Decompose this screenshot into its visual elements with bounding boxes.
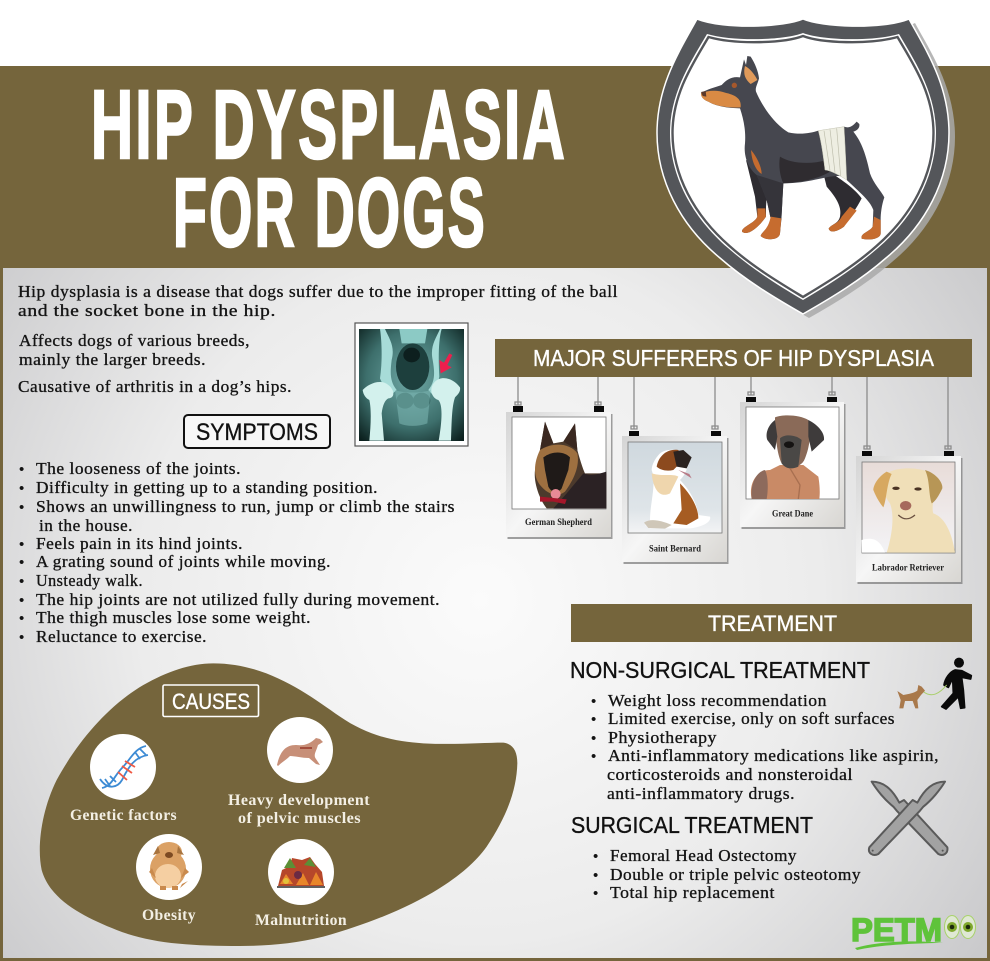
non-surgical list: • [591, 730, 596, 747]
shield badge with dog [657, 19, 955, 318]
cause: heavy development of pelvic muscles [228, 717, 370, 827]
intro text: Causative of arthritis in a dog’s hips. [18, 377, 292, 396]
title band [0, 66, 990, 268]
non-surgical list: Limited exercise, only on soft surfaces [608, 709, 895, 728]
panel border [0, 268, 990, 961]
symptoms list: • [19, 629, 24, 646]
icon: crossed scalpels [869, 782, 947, 855]
logo: PETMOO [851, 912, 976, 950]
non-surgical list: corticosteroids and nonsteroidal [607, 765, 853, 784]
symptoms list: • [19, 592, 24, 609]
treatment heading [571, 604, 972, 642]
non-surgical treatment heading: NON-SURGICAL TREATMENT [570, 657, 870, 683]
photo card: Great Dane [740, 402, 846, 529]
symptoms list: • [19, 573, 24, 590]
symptoms list: • [19, 554, 24, 571]
surgical list: • [593, 848, 598, 865]
title: FOR DOGS [173, 158, 487, 267]
symptoms list: The thigh muscles lose some weight. [36, 608, 311, 627]
cause: malnutrition [255, 839, 347, 929]
intro text: mainly the larger breeds. [19, 350, 206, 369]
symptoms list: Unsteady walk. [36, 571, 143, 590]
non-surgical list: Anti-inflammatory medications like aspirin, [608, 746, 939, 765]
intro text [18, 282, 618, 396]
photo card: Labrador Retriever: Labrador Retriever [872, 564, 945, 574]
icon: doberman with bandage [701, 56, 884, 239]
cause: malnutrition: Malnutrition [255, 912, 347, 929]
cause: obesity [136, 834, 202, 924]
x-ray image [355, 323, 468, 446]
panel: causes [40, 663, 517, 946]
surgical list: Femoral Head Ostectomy [610, 846, 797, 865]
symptoms list: Difficulty in getting up to a standing position. [36, 478, 378, 497]
intro text: and the socket bone in the hip. [18, 301, 276, 320]
major sufferers heading [495, 339, 972, 377]
non-surgical list: • [591, 693, 596, 710]
non-surgical list: Physiotherapy [608, 728, 717, 747]
cause: heavy development of pelvic muscles: of pelvic muscles [238, 810, 361, 827]
non-surgical list [591, 691, 939, 803]
surgical list: Double or triple pelvic osteotomy [610, 865, 861, 884]
non-surgical list: • [591, 748, 596, 765]
symptoms list: • [19, 480, 24, 497]
photo card: Saint Bernard [622, 436, 728, 564]
cause: heavy development of pelvic muscles: Heavy development [228, 792, 370, 809]
symptoms list: Feels pain in its hind joints. [36, 534, 243, 553]
cause: genetic factors: Genetic factors [70, 807, 177, 824]
symptoms list: • [19, 536, 24, 553]
cause: genetic factors [70, 734, 177, 824]
causes heading [163, 685, 258, 716]
surgical list [593, 846, 861, 902]
photo card: Labrador Retriever [856, 456, 962, 584]
title [91, 70, 567, 267]
non-surgical list: • [591, 711, 596, 728]
title: HIP DYSPLASIA [91, 70, 567, 179]
symptoms list: Shows an unwillingness to run, jump or climb the stairs [36, 497, 455, 516]
symptoms list: • [19, 499, 24, 516]
photo card: German Shepherd: German Shepherd [525, 518, 593, 528]
symptoms list: • [19, 610, 24, 627]
symptoms list: The hip joints are not utilized fully during movement. [36, 590, 440, 609]
symptoms list: Reluctance to exercise. [36, 627, 207, 646]
intro text: Hip dysplasia is a disease that dogs suffer due to the improper fitting of the ball [18, 282, 618, 301]
causes heading: CAUSES [172, 689, 250, 714]
non-surgical list: Weight loss recommendation [608, 691, 827, 710]
non-surgical list: anti-inflammatory drugs. [607, 784, 795, 803]
treatment heading: TREATMENT [708, 611, 837, 636]
symptoms list: in the house. [39, 516, 133, 535]
symptoms list [19, 459, 455, 646]
symptoms heading: SYMPTOMS [196, 419, 318, 446]
logo: PETMOO: PETM [851, 912, 942, 948]
photo card: German Shepherd [506, 412, 612, 539]
photo card: Great Dane: Great Dane [772, 510, 813, 520]
icon: person walking dog [897, 658, 971, 709]
symptoms list: A grating sound of joints while moving. [36, 552, 331, 571]
major sufferers heading: MAJOR SUFFERERS OF HIP DYSPLASIA [533, 345, 935, 371]
surgical list: Total hip replacement [610, 883, 775, 902]
surgical treatment heading: SURGICAL TREATMENT [571, 812, 813, 838]
body panel [2, 268, 987, 958]
intro text: Affects dogs of various breeds, [19, 331, 250, 350]
hanging strings and clips [515, 377, 951, 449]
cause: obesity: Obesity [142, 907, 196, 924]
symptoms list: The looseness of the joints. [36, 459, 241, 478]
surgical list: • [593, 867, 598, 884]
photo card: Saint Bernard: Saint Bernard [649, 544, 702, 554]
symptoms list: • [19, 461, 24, 478]
surgical list: • [593, 885, 598, 902]
